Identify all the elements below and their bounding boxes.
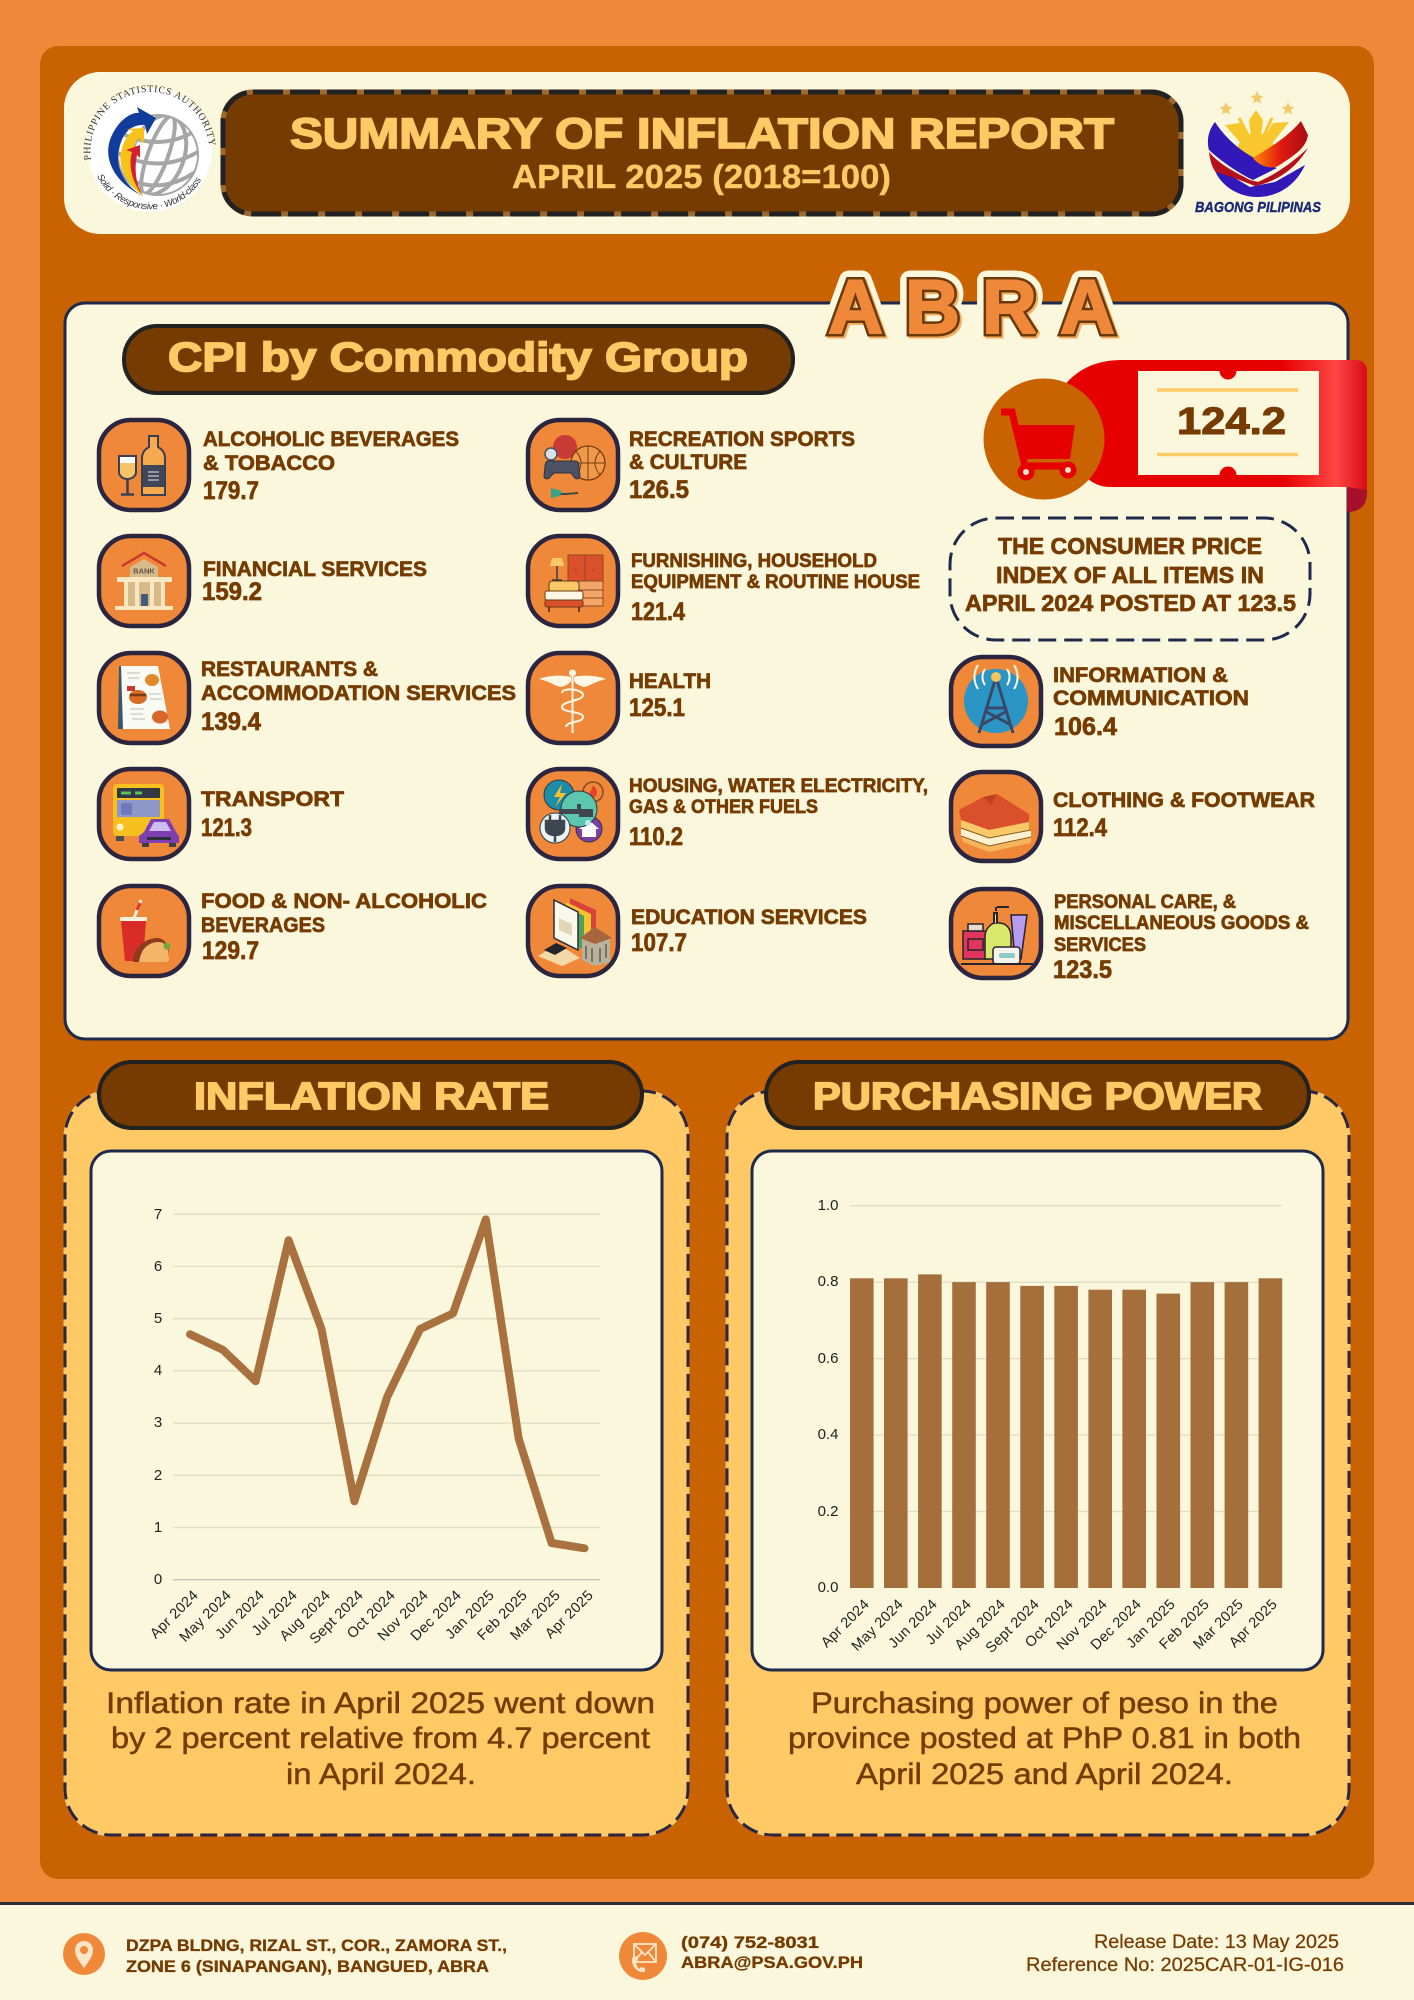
item: financial services [99,536,427,626]
logo: Bagong Pilipinas: BAGONG PILIPINAS [1195,199,1321,216]
release information: Reference No: 2025CAR-01-IG-016 [1026,1955,1344,1976]
icon: books and diploma [528,886,618,976]
heading: purchasing power [766,1062,1309,1128]
caption: inflation rate: in April 2024. [286,1758,476,1791]
item: furnishing, household equipment: FURNISHING, HOUSEHOLD [631,551,877,572]
item: housing, water, electricity, gas: 110.2 [629,823,683,851]
item: health [528,653,711,743]
bar chart: 1.0 [818,1197,838,1214]
icon: folded clothes [951,772,1041,861]
item: housing, water, electricity, gas [528,769,928,859]
icon: drink and taco [99,886,189,976]
callout: consumer price index note [950,518,1310,640]
line chart: 2 [154,1467,162,1484]
item: transport: 121.3 [201,814,252,842]
contact: (074) 752-8031 [681,1933,819,1952]
subtitle: APRIL 2025 (2018=100) [512,158,891,195]
line chart: 7 [154,1206,162,1223]
bar chart: Mar 2025 [1190,1597,1247,1653]
item: restaurants and accommodation services: 139.4 [201,708,261,736]
item: financial services: FINANCIAL SERVICES [203,558,427,581]
item: restaurants and accommodation services: RESTAURANTS & [201,658,378,681]
item: transport: TRANSPORT [201,788,344,811]
item: alcoholic beverages and tobacco: & TOBACCO [203,452,335,475]
caption: purchasing power: April 2025 and April 2024. [856,1758,1233,1791]
item: health: 125.1 [629,694,685,722]
callout: all items CPI ribbon [984,360,1367,512]
caption: purchasing power: province posted at PhP 0.81 in both [788,1722,1301,1755]
line chart: Nov 2024 [375,1588,432,1644]
bar chart: 0.2 [818,1503,838,1520]
label: ALCOHOLIC BEVERAGES [203,428,459,451]
logo: Philippine Statistics Authority: PHILIPPINE STATISTICS AUTHORITY [84,85,216,160]
item: information and communication: INFORMATION & [1053,664,1228,687]
bar chart: Oct 2024 [1022,1597,1077,1651]
ticket [1138,371,1319,475]
release information: Release Date: 13 May 2025 [1094,1932,1339,1953]
item: housing, water, electricity, gas: GAS & OTHER FUELS [629,797,818,818]
CPI value: 124.2 [1177,401,1286,443]
line chart: Jan 2025 [443,1588,498,1643]
panel: inflation rate [65,1062,688,1835]
heading: ABRA: ABRA [830,267,1117,352]
item: information and communication: COMMUNICATION [1053,687,1249,710]
bar chart: Aug 2024 [952,1597,1009,1653]
bar chart: Jul 2024 [923,1597,975,1648]
icon: bottle and glass [99,420,189,510]
item: furnishing, household equipment [528,536,920,626]
item: recreation sports and culture: & CULTURE [629,451,747,474]
icon: cosmetics [951,889,1041,978]
line chart: 1 [154,1519,162,1536]
release information [1026,1932,1344,1976]
address [126,1936,507,1976]
item: recreation sports and culture: 126.5 [629,476,689,504]
item: personal care and miscellaneous: MISCELLANEOUS GOODS & [1054,913,1309,934]
bar chart: 0.6 [818,1350,838,1367]
bar chart: 0.4 [818,1426,838,1443]
line chart: Apr 2024 [147,1588,202,1642]
line chart: 6 [154,1258,162,1275]
line chart: Mar 2025 [507,1588,564,1644]
ribbon fold [1347,487,1367,512]
bar chart: Apr 2025 [1226,1597,1281,1651]
icon: utilities [528,769,618,859]
logo: Philippine Statistics Authority [84,85,216,212]
line chart: Oct 2024 [344,1588,399,1642]
line chart: Feb 2025 [474,1588,531,1644]
icon: furniture [528,536,618,626]
item: personal care and miscellaneous: 123.5 [1053,956,1112,984]
line chart: Aug 2024 [277,1588,334,1644]
icon: location pin [63,1933,105,1975]
item: food and non-alcoholic beverages: FOOD & NON- ALCOHOLIC [201,890,487,913]
heading: purchasing power: PURCHASING POWER [813,1076,1262,1118]
heading: ABRA: ABRA [828,265,1115,350]
item: transport [99,769,344,859]
bar chart: 0.0 [818,1579,838,1596]
contact: ABRA@PSA.GOV.PH [681,1953,863,1972]
title text: SUMMARY OF INFLATION REPORT [290,110,1114,158]
bar chart: Jun 2024 [886,1597,941,1652]
bar chart: Sept 2024 [983,1597,1043,1656]
bar chart [752,1151,1323,1670]
panel: CPI by commodity group [65,265,1367,1039]
line chart: 4 [154,1362,162,1379]
item: clothing and footwear: 112.4 [1053,814,1107,842]
line chart: Sept 2024 [307,1588,367,1647]
item: restaurants and accommodation services [99,653,516,743]
bar chart: May 2024 [849,1597,907,1655]
line chart: 3 [154,1414,162,1431]
item: clothing and footwear: CLOTHING & FOOTWEAR [1053,789,1315,812]
item: recreation sports and culture: RECREATION SPORTS [629,428,855,451]
line chart: Jul 2024 [249,1588,301,1639]
heading: ABRA: ABRA [828,265,1115,350]
icon: bus and car [99,769,189,859]
value: 179.7 [203,477,259,505]
header band [64,72,1350,234]
icon: sports equipment [528,420,618,510]
caption: inflation rate: by 2 percent relative from 4.7 percent [111,1722,651,1755]
item: personal care and miscellaneous: SERVICES [1054,935,1146,956]
item: recreation sports and culture [528,420,855,510]
caption: inflation rate [106,1687,655,1791]
icon: signal tower [951,657,1041,746]
heading: inflation rate [99,1062,642,1128]
bar chart: 0.8 [818,1273,838,1290]
contact [681,1933,863,1972]
line chart: 0 [154,1571,162,1588]
icon: shopping cart [984,378,1104,500]
item: information and communication: 106.4 [1054,713,1117,741]
item: personal care and miscellaneous: PERSONAL CARE, & [1054,892,1236,913]
item: housing, water, electricity, gas: HOUSING, WATER ELECTRICITY, [629,776,928,797]
icon: bank [99,536,189,626]
item: restaurants and accommodation services: ACCOMMODATION SERVICES [201,682,516,705]
heading: inflation rate: INFLATION RATE [194,1076,549,1118]
panel: purchasing power [727,1062,1349,1835]
title banner [223,92,1181,214]
heading: ABRA: ABRA [828,265,1115,350]
item: health: HEALTH [629,670,711,693]
line chart: May 2024 [177,1588,235,1646]
bar chart: Feb 2025 [1156,1597,1213,1653]
heading: CPI by Commodity Group [124,326,793,393]
footer [0,1902,1414,2000]
icon: caduceus [528,653,618,743]
callout: consumer price index note: INDEX OF ALL ITEMS IN [996,562,1264,588]
icon: menu [99,653,189,743]
bar chart: Dec 2024 [1088,1597,1145,1653]
line chart: Jun 2024 [213,1588,268,1643]
item: furnishing, household equipment: EQUIPMENT & ROUTINE HOUSE [631,572,920,593]
address: ZONE 6 (SINAPANGAN), BANGUED, ABRA [126,1957,489,1976]
line chart: Dec 2024 [408,1588,465,1644]
item: food and non-alcoholic beverages: BEVERAGES [201,914,325,937]
item: alcoholic beverages and tobacco [99,420,459,510]
bar chart: Jan 2025 [1124,1597,1179,1652]
logo: Philippine Statistics Authority: Solid · Responsive · World-class [98,174,200,210]
item: financial services: 159.2 [202,578,262,606]
caption: purchasing power [788,1687,1301,1791]
logo: Bagong Pilipinas [1195,91,1321,216]
line chart [91,1151,662,1670]
address: DZPA BLDNG, RIZAL ST., COR., ZAMORA ST., [126,1936,507,1955]
item: food and non-alcoholic beverages [99,886,487,976]
ribbon [1060,360,1367,490]
line chart: Apr 2025 [542,1588,597,1642]
icon: bank: BANK [133,566,155,576]
icon: mail and phone [619,1932,667,1980]
line chart: 5 [154,1310,162,1327]
bar chart: Nov 2024 [1054,1597,1111,1653]
heading: CPI by Commodity Group: CPI by Commodity Group [168,334,748,380]
caption: inflation rate: Inflation rate in April 2025 went down [106,1687,655,1720]
item: furnishing, household equipment: 121.4 [631,598,685,626]
callout: consumer price index note: THE CONSUMER PRICE [998,533,1262,559]
bar chart: Apr 2024 [818,1597,873,1651]
caption: purchasing power: Purchasing power of peso in the [811,1687,1278,1720]
item: education services: EDUCATION SERVICES [631,906,867,929]
item: clothing and footwear [951,772,1315,861]
item: education services [528,886,867,976]
item: food and non-alcoholic beverages: 129.7 [202,937,259,965]
item: information and communication [951,657,1249,746]
callout: consumer price index note: APRIL 2024 POSTED AT 123.5 [965,590,1296,616]
item: personal care and miscellaneous [951,889,1309,984]
item: education services: 107.7 [631,929,687,957]
